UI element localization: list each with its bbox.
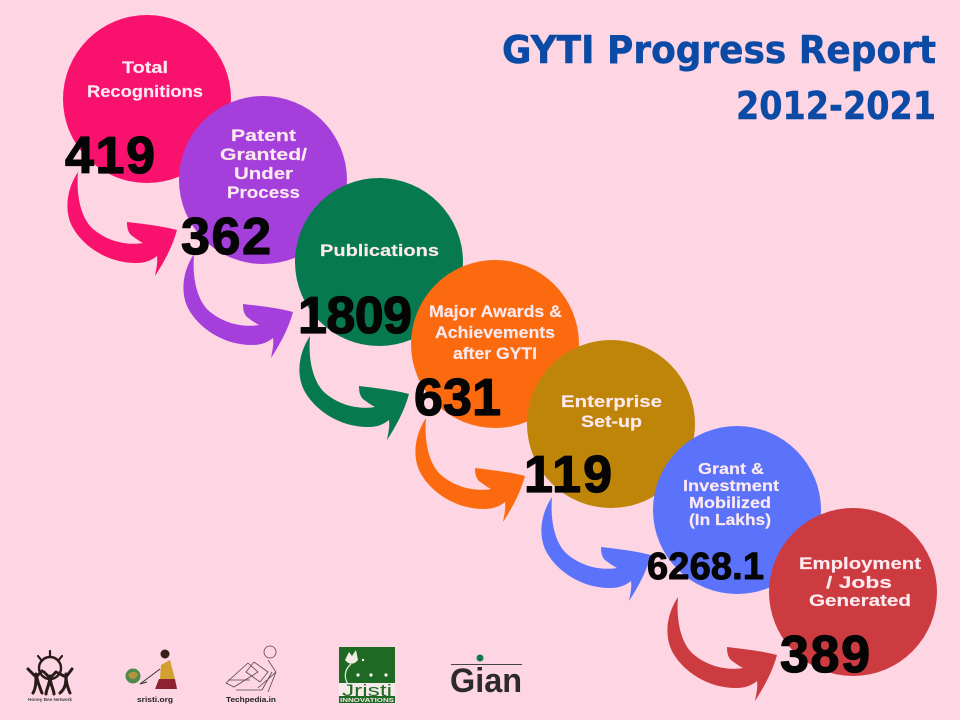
logo: Sristi Innovations <box>339 647 395 704</box>
step: patents: Granted/ <box>220 145 307 164</box>
logo: Honey Bee Network: Honey Bee Network <box>28 697 73 702</box>
step: total recognitions: 419 <box>65 127 155 185</box>
step: employment: / Jobs <box>826 573 892 592</box>
step: major awards: 631 <box>414 369 501 427</box>
step: patents: 362 <box>181 208 271 266</box>
step: publications: 1809 <box>298 287 412 345</box>
step: publications <box>295 178 463 440</box>
step: employment: Generated <box>809 591 911 610</box>
step: grant and investment <box>647 426 821 701</box>
step: employment: 389 <box>780 626 870 684</box>
step: major awards: after GYTI <box>453 344 537 363</box>
step: total recognitions: Total <box>122 58 168 77</box>
logo: sristi.org <box>126 650 177 704</box>
logo: Honey Bee Network <box>28 651 73 702</box>
logo: sristi.org: sristi.org <box>137 695 173 704</box>
logo: Techpedia.in <box>226 646 276 704</box>
step: patents: Patent <box>231 126 296 145</box>
step: enterprise: Enterprise <box>561 392 662 411</box>
title: GYTI Progress Report <box>502 28 936 72</box>
step: enterprise: Set-up <box>581 412 642 431</box>
logo: Techpedia.in: Techpedia.in <box>226 695 276 704</box>
title: 2012-2021 <box>736 84 936 128</box>
step: patents: Process <box>227 183 300 202</box>
logo: Sristi Innovations: INNOVATIONS <box>340 698 394 704</box>
step: employment: Employment <box>799 554 921 573</box>
step: enterprise: 119 <box>524 446 612 504</box>
step: major awards <box>411 260 579 522</box>
step: grant and investment: (In Lakhs) <box>689 512 771 529</box>
step: grant and investment: Mobilized <box>689 495 771 512</box>
logo: Sristi Innovations: Jristi <box>342 681 392 700</box>
step: patents <box>179 96 347 358</box>
step: major awards: Achievements <box>435 323 555 342</box>
step: publications: Publications <box>320 241 439 260</box>
title <box>502 28 936 128</box>
step: major awards: Major Awards & <box>429 302 562 321</box>
logo: GIAN: Gian <box>450 662 522 700</box>
step: total recognitions: Recognitions <box>87 82 203 101</box>
step: employment <box>769 508 937 684</box>
step: grant and investment: Investment <box>683 478 780 495</box>
step: enterprise <box>524 340 695 601</box>
step: grant and investment: Grant & <box>698 461 765 478</box>
step: grant and investment: 6268.1 <box>647 546 764 588</box>
step: total recognitions <box>63 15 231 276</box>
step: patents: Under <box>234 164 293 183</box>
